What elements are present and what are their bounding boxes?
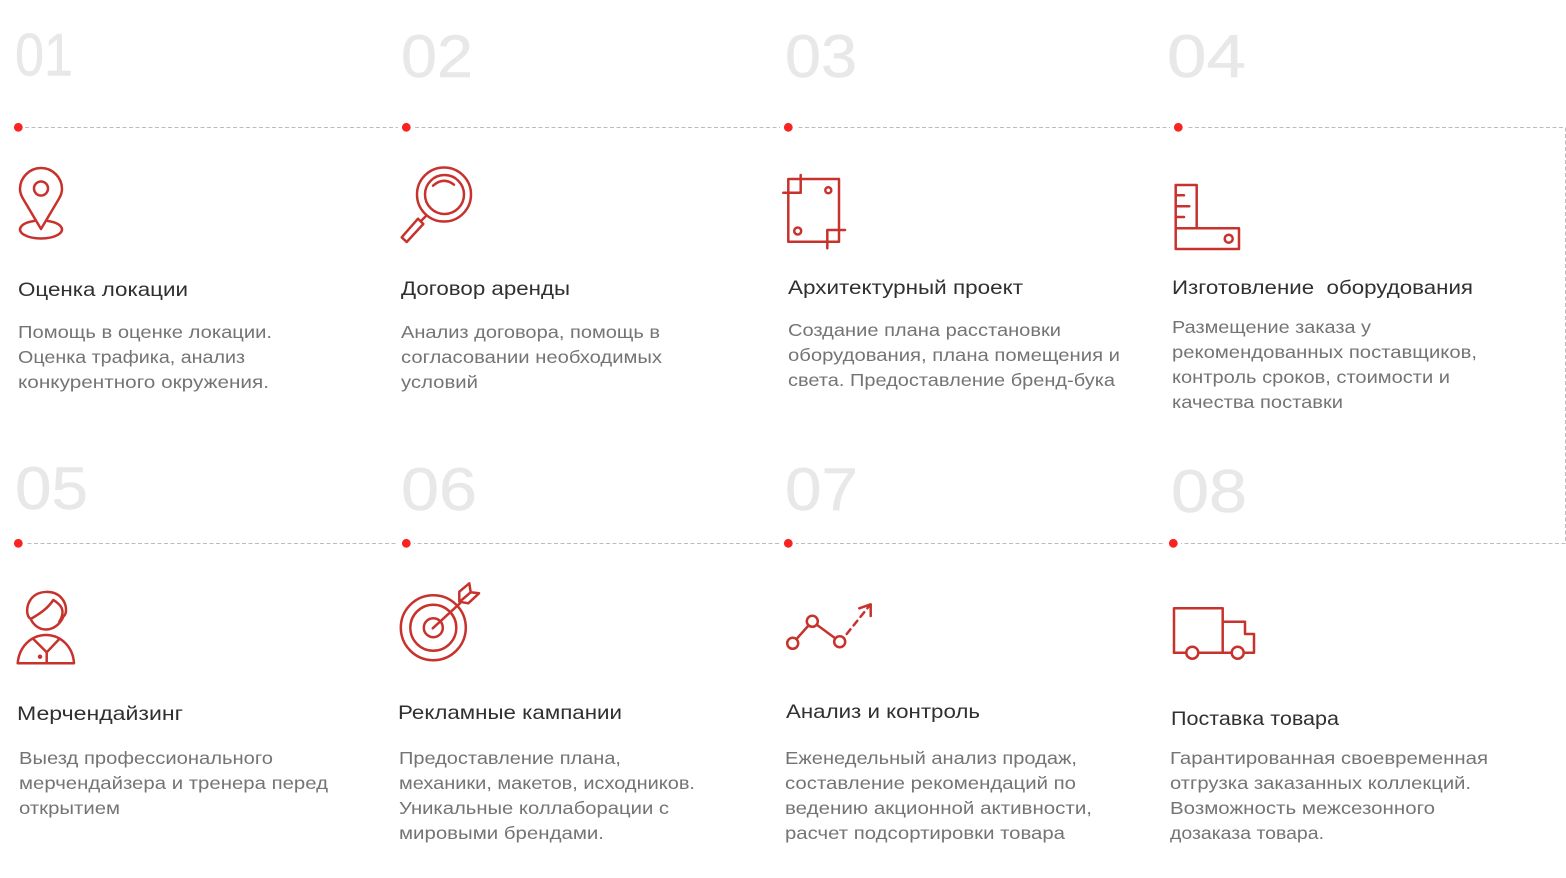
description: location assessment: Помощь в оценке локации. <box>18 322 272 342</box>
description: equipment manufacturing <box>1172 317 1477 412</box>
step 02: lease agreement <box>401 23 662 392</box>
description: merchandising <box>19 748 328 818</box>
description: product delivery: отгрузка заказанных коллекций. <box>1170 773 1471 793</box>
description: analysis and control: ведению акционной активности, <box>785 798 1092 818</box>
title: equipment manufacturing: Изготовление оборудования <box>1172 277 1473 299</box>
description: location assessment: Оценка трафика, анализ <box>18 347 245 367</box>
number 05: 05 <box>15 455 88 522</box>
description: advertising campaigns: механики, макетов, исходников. <box>399 773 695 793</box>
title: lease agreement: Договор аренды <box>401 278 570 300</box>
step 01: location assessment <box>14 22 272 392</box>
timeline dot 01 <box>14 123 23 132</box>
description: advertising campaigns: Предоставление плана, <box>399 748 621 768</box>
description: product delivery: Гарантированная своевременная <box>1170 748 1488 768</box>
step 07: analysis and control <box>784 456 1092 843</box>
icon: trend line with arrow <box>787 604 871 649</box>
number 02: 02 <box>401 23 473 90</box>
description: lease agreement: Анализ договора, помощь в <box>401 322 660 342</box>
title: product delivery: Поставка товара <box>1171 708 1339 730</box>
icon: floor plan <box>783 175 845 248</box>
description: lease agreement <box>401 322 662 392</box>
icon: map pin <box>20 168 62 238</box>
number 03: 03 <box>785 23 857 90</box>
title: advertising campaigns: Рекламные кампании <box>398 702 622 724</box>
step 06: advertising campaigns <box>398 456 695 843</box>
description: location assessment: конкурентного окружения. <box>18 372 269 392</box>
title: location assessment: Оценка локации <box>18 279 188 301</box>
icon: delivery truck <box>1174 608 1254 659</box>
timeline dot 04 <box>1174 123 1183 132</box>
description: equipment manufacturing: контроль сроков, стоимости и <box>1172 367 1450 387</box>
title: merchandising: Мерчендайзинг <box>17 703 183 725</box>
description: product delivery: Возможность межсезонного <box>1170 798 1435 818</box>
timeline dot 06 <box>402 539 411 548</box>
description: analysis and control: составление рекомендаций по <box>785 773 1076 793</box>
description: merchandising: открытием <box>19 798 120 818</box>
description: merchandising: мерчендайзера и тренера перед <box>19 773 328 793</box>
description: architectural project: света. Предоставление бренд-бука <box>788 370 1115 390</box>
timeline dot 02 <box>402 123 411 132</box>
description: architectural project <box>788 320 1120 390</box>
description: analysis and control <box>785 748 1092 843</box>
icon: magnifying glass <box>402 168 471 242</box>
description: analysis and control: расчет подсортировки товара <box>785 823 1065 843</box>
step 05: merchandising <box>14 455 328 818</box>
description: architectural project: Создание плана расстановки <box>788 320 1061 340</box>
description: equipment manufacturing: рекомендованных поставщиков, <box>1172 342 1477 362</box>
description: location assessment <box>18 322 272 392</box>
timeline dot 07 <box>784 539 793 548</box>
description: advertising campaigns <box>399 748 695 843</box>
title: analysis and control: Анализ и контроль <box>786 701 980 723</box>
timeline dot 03 <box>784 123 793 132</box>
description: product delivery: дозаказа товара. <box>1170 823 1324 843</box>
number 08: 08 <box>1171 458 1247 525</box>
description: advertising campaigns: мировыми брендами. <box>399 823 604 843</box>
icon: merchandiser person <box>18 592 74 663</box>
description: merchandising: Выезд профессионального <box>19 748 273 768</box>
step 03: architectural project <box>783 23 1120 390</box>
description: analysis and control: Еженедельный анализ продаж, <box>785 748 1077 768</box>
description: lease agreement: согласовании необходимых <box>401 347 662 367</box>
step 08: product delivery <box>1169 458 1488 843</box>
description: advertising campaigns: Уникальные коллаборации с <box>399 798 669 818</box>
description: equipment manufacturing: Размещение заказа у <box>1172 317 1371 337</box>
description: lease agreement: условий <box>401 372 478 392</box>
number 04: 04 <box>1167 23 1246 90</box>
icon: set square ruler <box>1176 185 1239 249</box>
icon: target with arrow <box>401 583 479 660</box>
description: architectural project: оборудования, плана помещения и <box>788 345 1120 365</box>
timeline dot 08 <box>1169 539 1178 548</box>
number 07: 07 <box>785 456 858 523</box>
number 01: 01 <box>15 22 73 88</box>
step 04: equipment manufacturing <box>1167 23 1477 412</box>
number 06: 06 <box>401 456 477 523</box>
timeline connector: dashed path through both rows <box>25 122 1566 549</box>
title: architectural project: Архитектурный проект <box>788 277 1023 299</box>
description: product delivery <box>1170 748 1488 843</box>
description: equipment manufacturing: качества поставки <box>1172 392 1343 412</box>
timeline dot 05 <box>14 539 23 548</box>
